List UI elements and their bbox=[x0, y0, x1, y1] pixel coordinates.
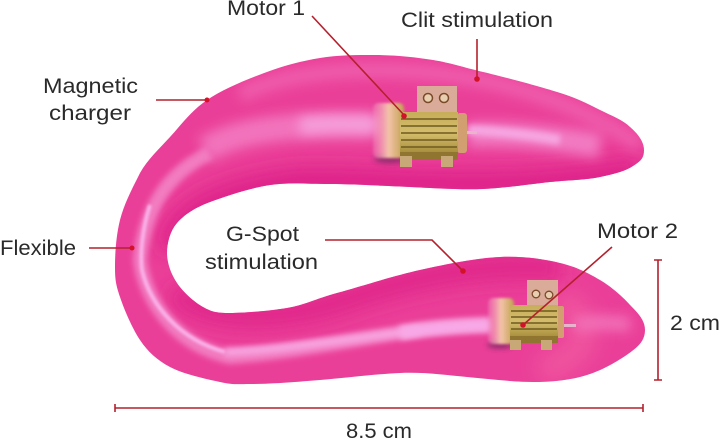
label: Magnetic charger bbox=[43, 75, 210, 125]
label: Clit stimulation bbox=[401, 9, 553, 82]
label: Motor 2: Motor 2 bbox=[597, 220, 678, 243]
label: Motor 2 bbox=[520, 220, 678, 328]
device body bbox=[115, 55, 645, 384]
label: Motor 1 bbox=[227, 0, 407, 119]
label: Magnetic charger: Magnetic bbox=[43, 75, 138, 98]
motor 1 bbox=[373, 86, 477, 167]
motor 2 bbox=[487, 280, 576, 350]
label: Flexible: Flexible bbox=[0, 237, 76, 260]
dimension: width 8.5 cm bbox=[115, 404, 643, 440]
label: G-Spot stimulation: G-Spot bbox=[226, 223, 299, 246]
upper highlight bbox=[205, 125, 375, 150]
label: G-Spot stimulation: stimulation bbox=[205, 251, 318, 274]
label: Magnetic charger: charger bbox=[49, 102, 131, 125]
dimension: height 2 cm bbox=[654, 260, 720, 380]
shading bbox=[170, 170, 640, 250]
dimension: height 2 cm: 2 cm bbox=[670, 312, 720, 335]
label: G-Spot stimulation bbox=[205, 223, 466, 274]
lower highlight bbox=[140, 153, 490, 357]
label: Clit stimulation: Clit stimulation bbox=[401, 9, 553, 32]
label: Flexible bbox=[0, 237, 134, 260]
